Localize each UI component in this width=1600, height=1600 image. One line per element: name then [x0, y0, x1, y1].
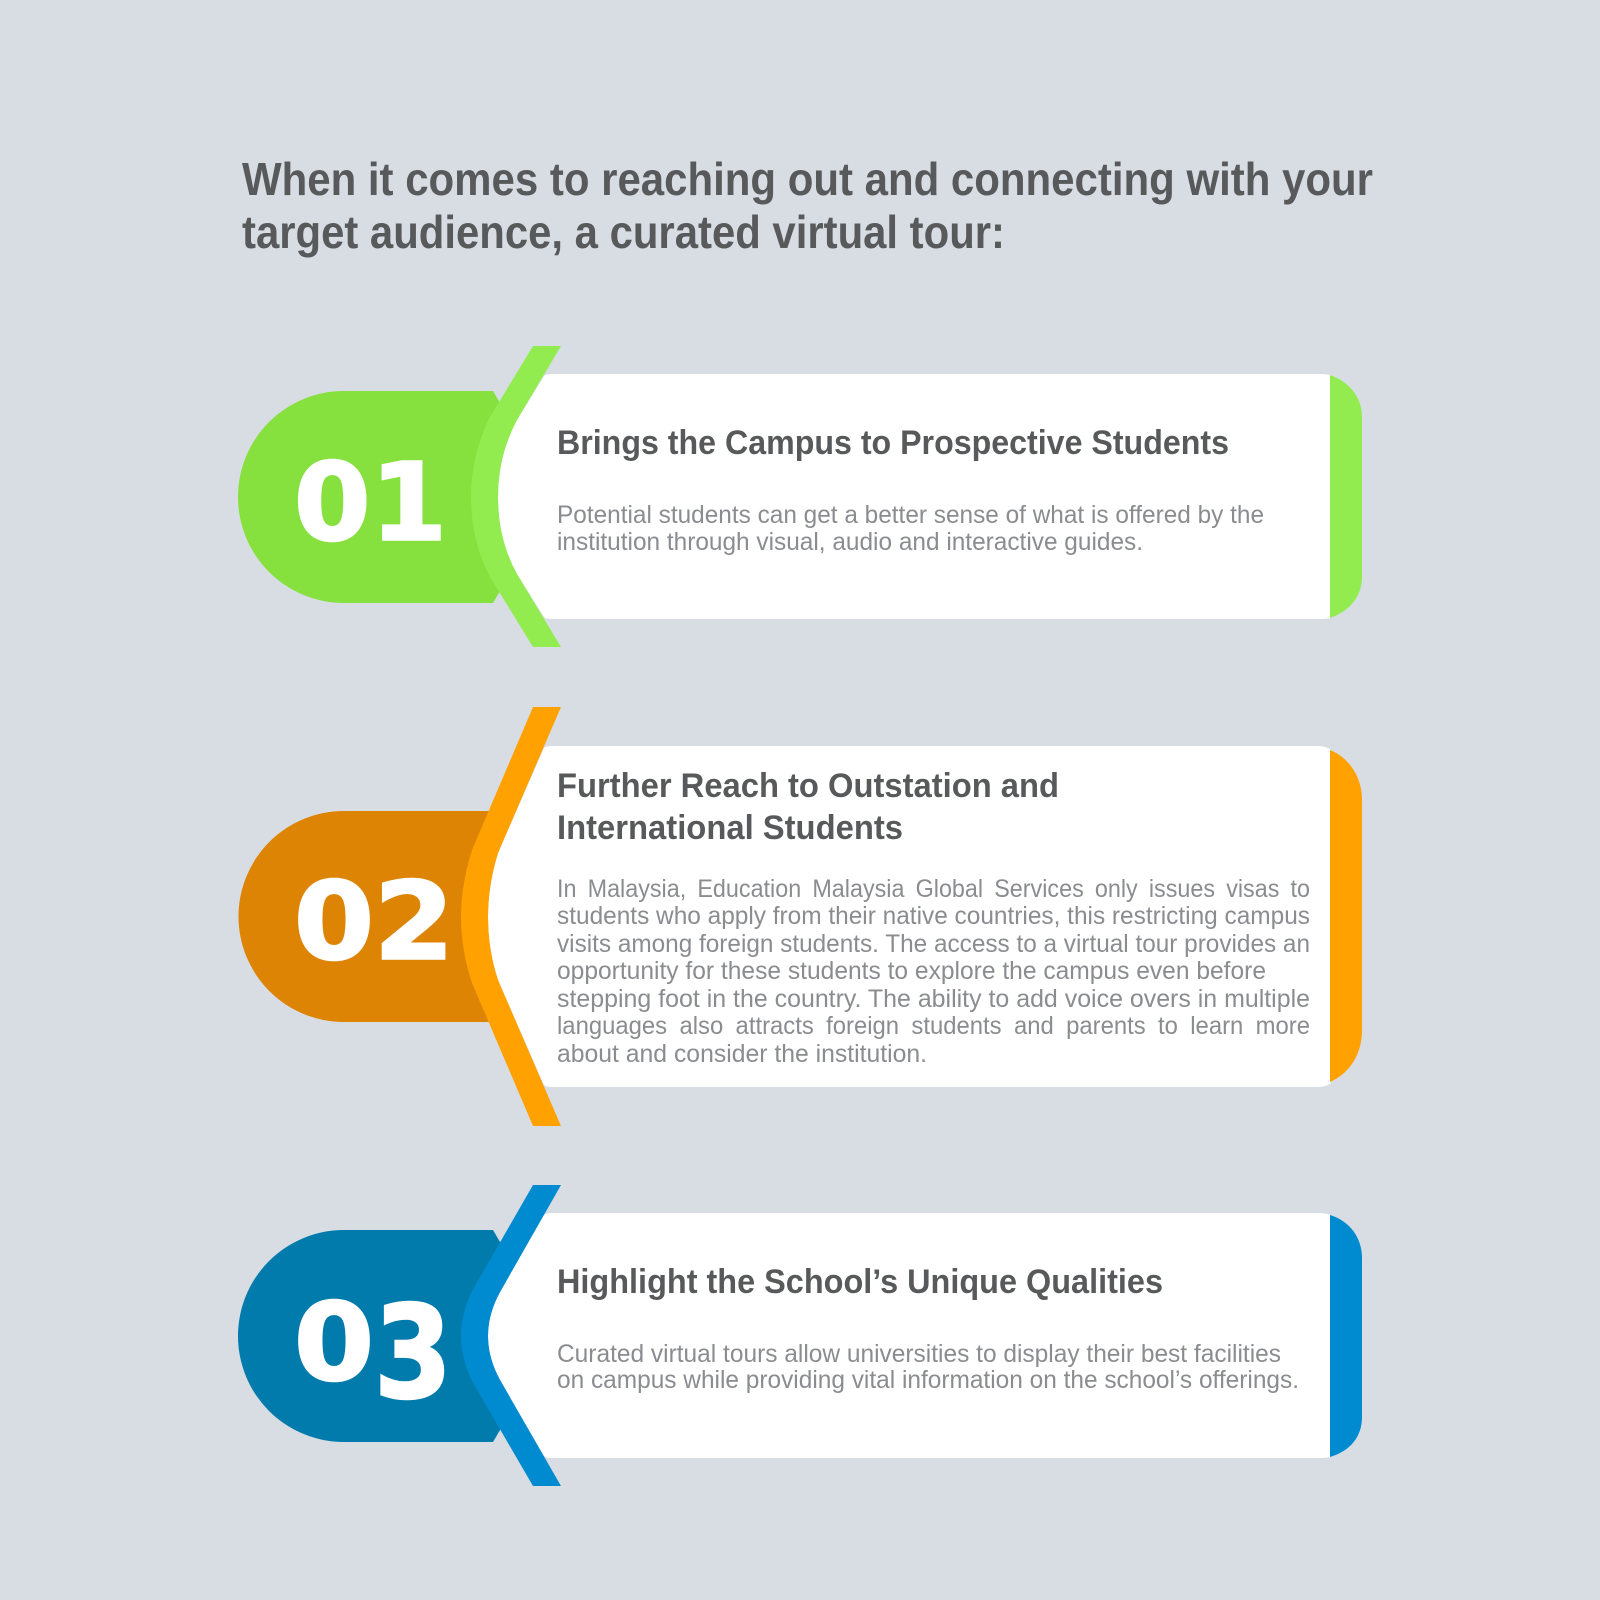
- right cap 03: [1330, 1215, 1362, 1457]
- body 02: about and consider the institution.: [557, 1040, 927, 1068]
- body 02: [557, 875, 1310, 1068]
- number pill 02: [238, 811, 500, 1022]
- number 01: 01: [294, 442, 447, 566]
- panel: item 03: [238, 1185, 1362, 1486]
- number pill 03: [238, 1230, 510, 1442]
- right cap 02: [1330, 750, 1362, 1082]
- body 02: stepping foot in the country. The ability to add voice overs in multiple: [557, 985, 1310, 1013]
- number 03: 0: [294, 1282, 374, 1406]
- heading 03: Highlight the School’s Unique Qualities: [557, 1263, 1163, 1301]
- body 02: In Malaysia, Education Malaysia Global Services only issues visas to: [557, 875, 1310, 903]
- chevron band 01: [471, 346, 561, 647]
- number pill 01: [238, 391, 510, 603]
- body 01: [557, 501, 1264, 556]
- heading 02: [557, 767, 1059, 847]
- card 01 background: [498, 374, 1331, 619]
- chevron band 02: [461, 707, 561, 1126]
- title: target audience, a curated virtual tour:: [242, 206, 1005, 258]
- body 02: visits among foreign students. The access to a virtual tour provides an: [557, 930, 1310, 958]
- number 03: 3: [374, 1279, 452, 1428]
- body 03: [557, 1340, 1299, 1394]
- body 03: Curated virtual tours allow universities to display their best facilities: [557, 1340, 1281, 1368]
- body 02: languages also attracts foreign students and parents to learn more: [557, 1012, 1310, 1040]
- heading 01: Brings the Campus to Prospective Students: [557, 424, 1229, 462]
- heading 02: Further Reach to Outstation and: [557, 767, 1059, 805]
- panel: item 02: [238, 707, 1362, 1126]
- body 01: Potential students can get a better sense of what is offered by the: [557, 501, 1264, 529]
- body 02: opportunity for these students to explore the campus even before: [557, 957, 1266, 985]
- number 02: 02: [294, 860, 454, 984]
- body 02: students who apply from their native countries, this restricting campus: [557, 902, 1310, 930]
- right cap 01: [1330, 375, 1362, 618]
- number 03: [294, 1279, 452, 1428]
- panel: item 01: [238, 346, 1362, 647]
- card 02 background: [488, 746, 1331, 1087]
- title: When it comes to reaching out and connecting with your: [242, 153, 1373, 205]
- heading 02: International Students: [557, 809, 903, 847]
- chevron band 03: [461, 1185, 561, 1486]
- card 03 background: [488, 1213, 1331, 1458]
- body 03: on campus while providing vital information on the school’s offerings.: [557, 1366, 1299, 1394]
- title: [242, 153, 1373, 258]
- body 01: institution through visual, audio and interactive guides.: [557, 528, 1143, 556]
